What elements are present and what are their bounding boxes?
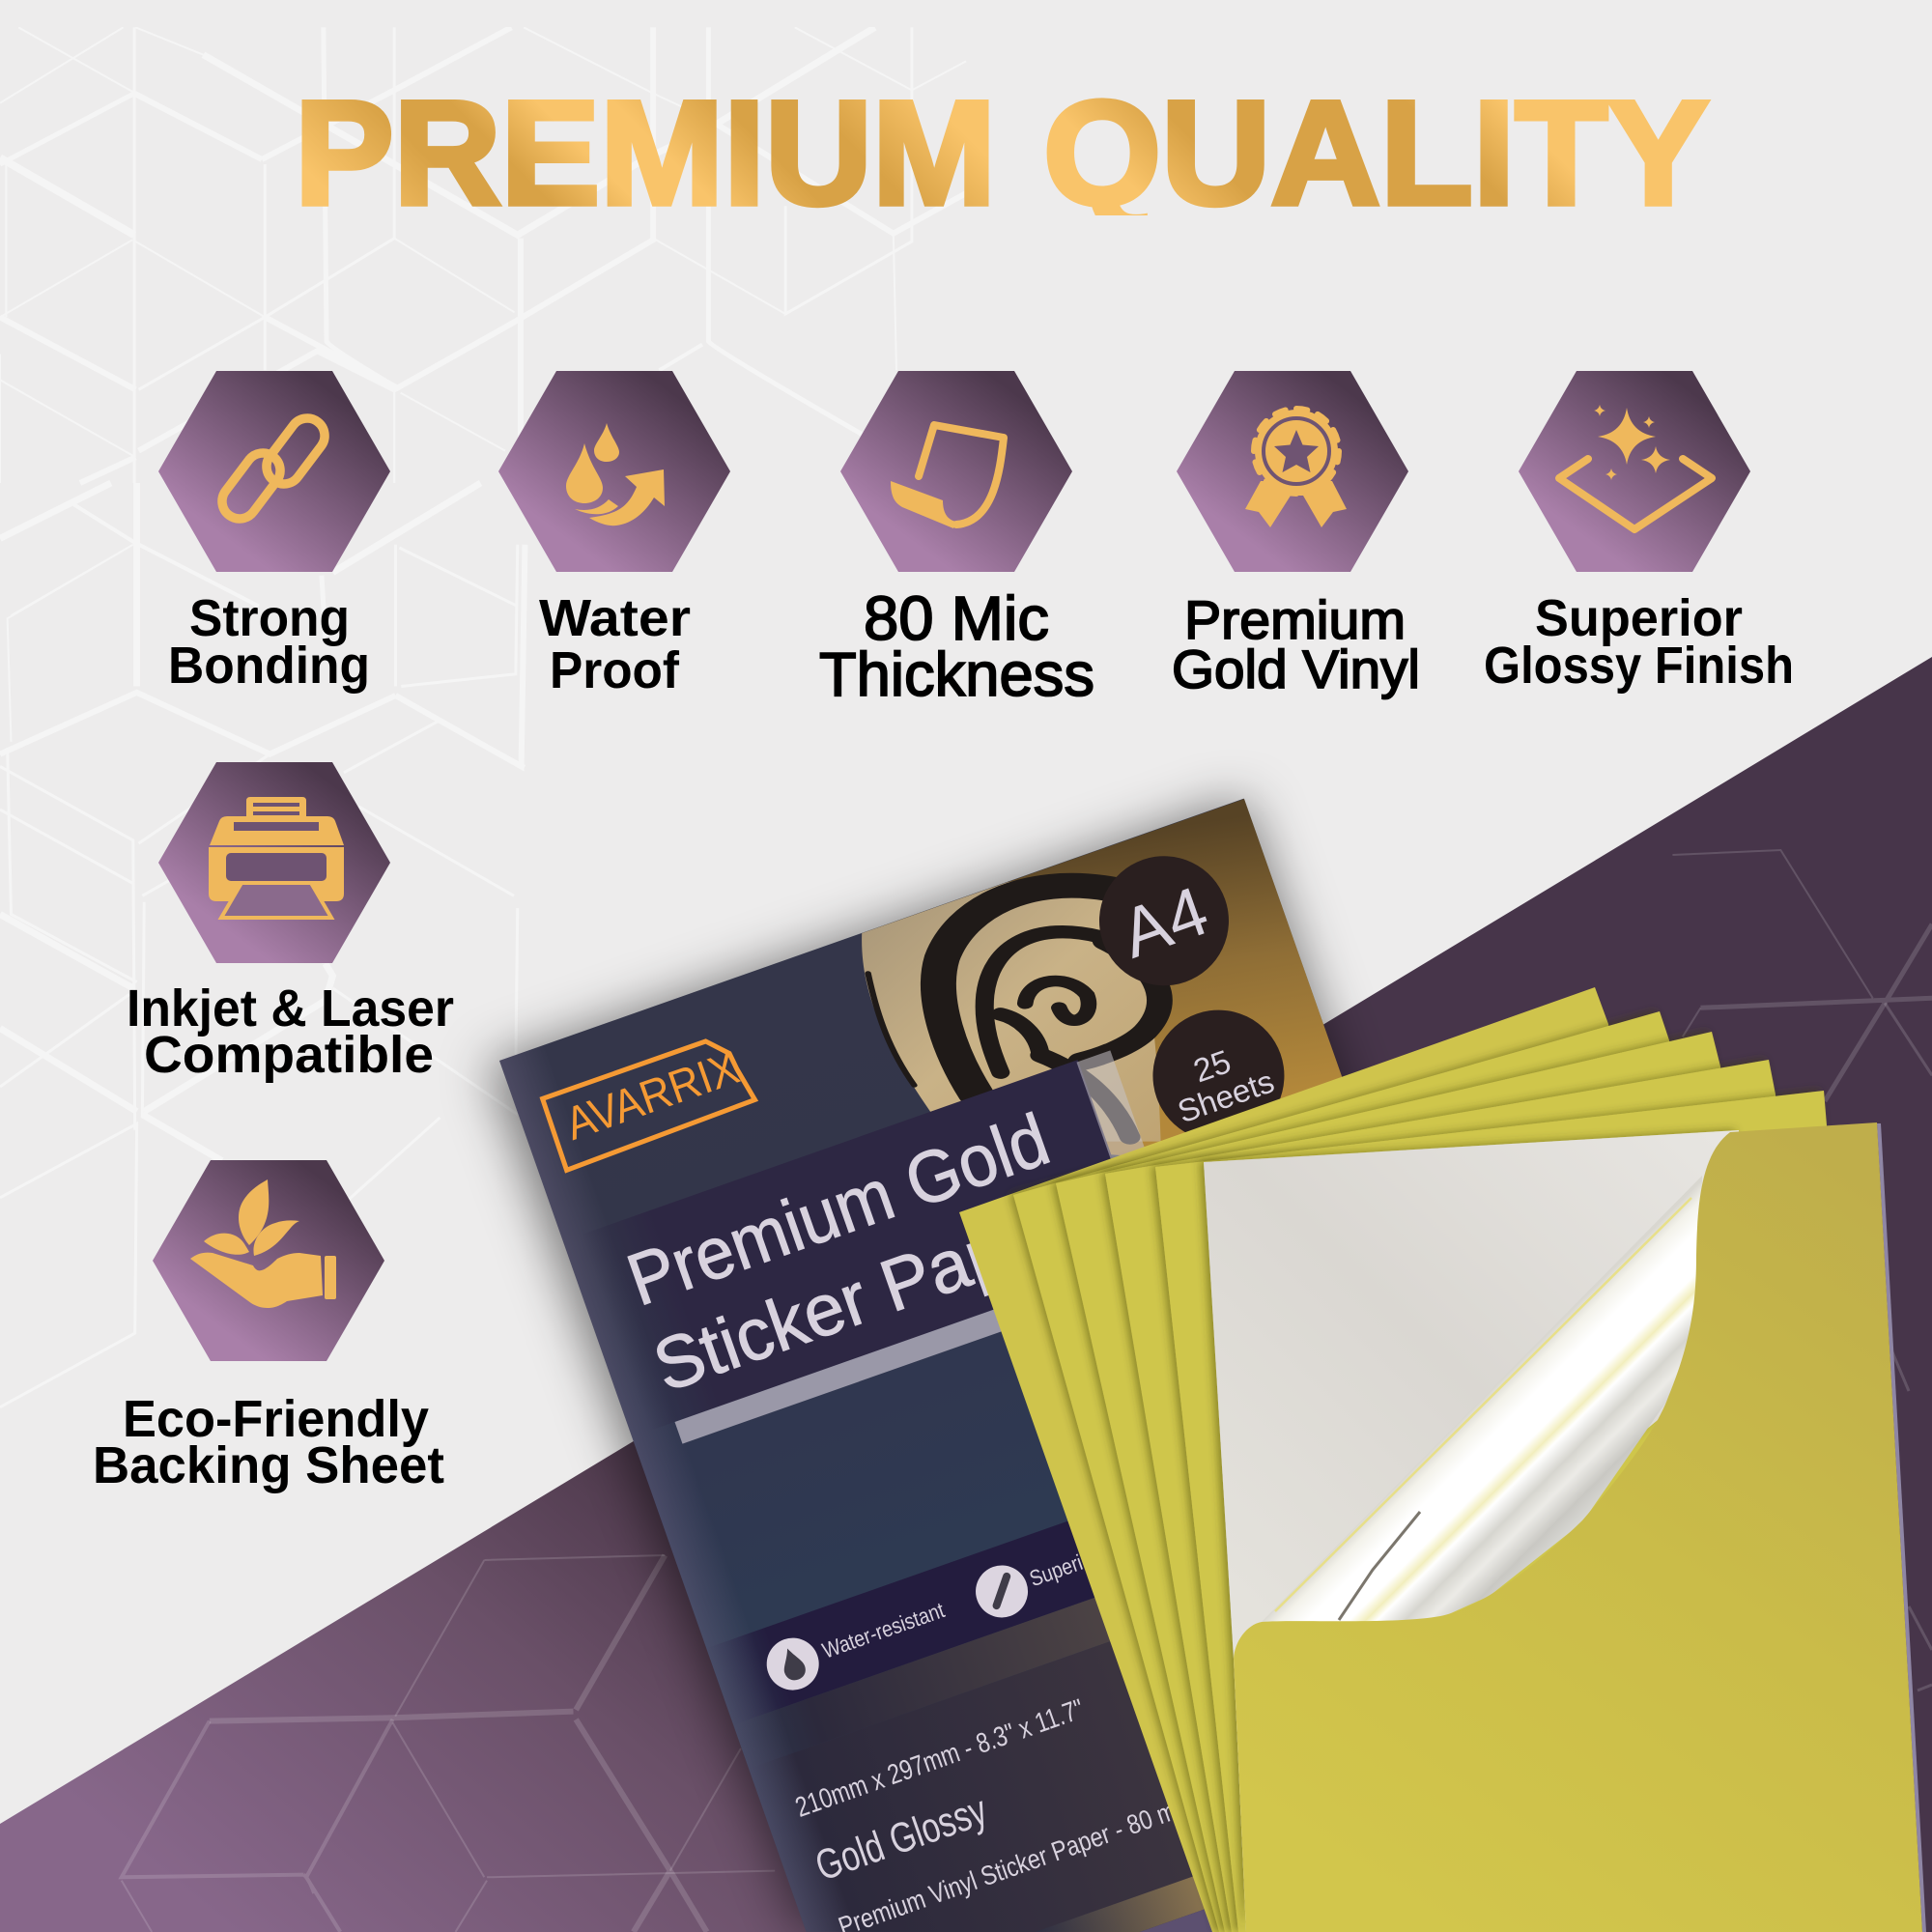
label: Bonding xyxy=(168,637,370,695)
product name: Sticker Paper xyxy=(643,1186,1079,1407)
product name: Premium Gold xyxy=(617,1098,1060,1321)
label xyxy=(1484,589,1794,695)
sheet 4 xyxy=(1056,1032,1729,1932)
label: Eco-Friendly xyxy=(123,1390,429,1448)
front sheet edge xyxy=(1877,1123,1926,1932)
label xyxy=(1172,589,1420,699)
icon: water drops and arrow xyxy=(566,423,665,526)
feature: superior bonding xyxy=(969,1509,1177,1625)
icon: printer xyxy=(209,797,344,918)
label xyxy=(819,583,1094,709)
icon: peeled sheet xyxy=(891,425,1004,528)
feature: water resistant: Water-resistant xyxy=(819,1597,948,1663)
label xyxy=(127,980,454,1084)
sheet 2 xyxy=(1155,1091,1827,1932)
front gold sheet with curl xyxy=(1234,1122,1922,1932)
sheet 6 xyxy=(959,987,1642,1932)
hexagon badge xyxy=(498,371,730,572)
title: PREMIUM xyxy=(295,71,996,236)
feature: Eco-Friendly Backing Sheet xyxy=(93,1160,444,1494)
hexagon badge xyxy=(158,762,390,963)
label: Thickness xyxy=(819,639,1094,709)
label: Glossy Finish xyxy=(1484,637,1794,695)
feature: Inkjet and Laser Compatible xyxy=(127,762,454,1084)
sheet 3 xyxy=(1105,1060,1777,1932)
badge: 25 sheets: 25 xyxy=(1189,1043,1236,1090)
product name xyxy=(613,1098,1089,1407)
peel yellow reflection xyxy=(1275,1198,1691,1611)
purple panel hexagon pattern xyxy=(122,850,1932,1932)
title band xyxy=(582,1060,1147,1431)
package lettering xyxy=(526,838,1511,1932)
purple diagonal panel xyxy=(0,657,1932,1932)
spec text: 210mm x 297mm - 8.3" x 11.7" xyxy=(792,1693,1088,1824)
label: 80 Mic xyxy=(864,583,1049,653)
label: Superior xyxy=(1535,589,1743,647)
label: Premium xyxy=(1184,589,1406,650)
label xyxy=(93,1390,444,1494)
icon: award rosette xyxy=(1245,409,1347,527)
product: sticker paper package xyxy=(462,775,1358,1932)
package gold artwork xyxy=(862,799,1343,1155)
feature: water resistant xyxy=(759,1586,953,1697)
hexagon badge xyxy=(1519,371,1750,572)
hexagon badge xyxy=(153,1160,384,1361)
hexagon badge xyxy=(1177,371,1408,572)
hexagon badge xyxy=(158,371,390,572)
label: Compatible xyxy=(144,1026,434,1084)
brand logo: AVARRIX xyxy=(559,1042,746,1151)
label xyxy=(168,589,370,695)
label xyxy=(539,589,691,699)
label: Water xyxy=(539,589,691,647)
badge: A4 xyxy=(1082,838,1246,1004)
icon: hand holding plant xyxy=(190,1179,336,1308)
label: Inkjet & Laser xyxy=(127,980,454,1037)
feature: Superior Glossy Finish xyxy=(1484,371,1794,695)
hexagon badge xyxy=(840,371,1072,572)
white backing xyxy=(1204,1130,1739,1932)
spec text xyxy=(792,1670,1195,1932)
package cover xyxy=(499,799,1614,1932)
icon: sparkles over glossy surface xyxy=(1559,405,1712,529)
label: Gold Vinyl xyxy=(1172,639,1420,699)
label: Backing Sheet xyxy=(93,1436,444,1494)
title: QUALITY xyxy=(1043,71,1709,236)
badge: 25 sheets xyxy=(1135,992,1302,1159)
background hexagon pattern xyxy=(0,27,966,1407)
badge: 25 sheets: Sheets xyxy=(1173,1063,1279,1129)
label: Proof xyxy=(550,641,680,699)
product: fanned gold sticker sheets xyxy=(959,987,1926,1932)
silver peel xyxy=(1262,1176,1702,1625)
feature: 80 Mic Thickness xyxy=(819,371,1094,709)
sheet 5 xyxy=(1013,1011,1690,1932)
label: Strong xyxy=(189,589,350,647)
package shadow xyxy=(488,799,1546,1932)
feature: Water Proof xyxy=(498,371,730,699)
feature: superior bonding: Superior Bonding xyxy=(1026,1520,1171,1591)
spec text: Gold Glossy xyxy=(810,1786,993,1890)
title xyxy=(301,98,1712,215)
badge: A4: A4 xyxy=(1112,872,1217,974)
peel dark streak xyxy=(1339,1512,1420,1620)
feature: Strong Bonding xyxy=(158,371,390,695)
feature: Premium Gold Vinyl xyxy=(1172,371,1420,699)
icon: chain link xyxy=(215,412,331,526)
